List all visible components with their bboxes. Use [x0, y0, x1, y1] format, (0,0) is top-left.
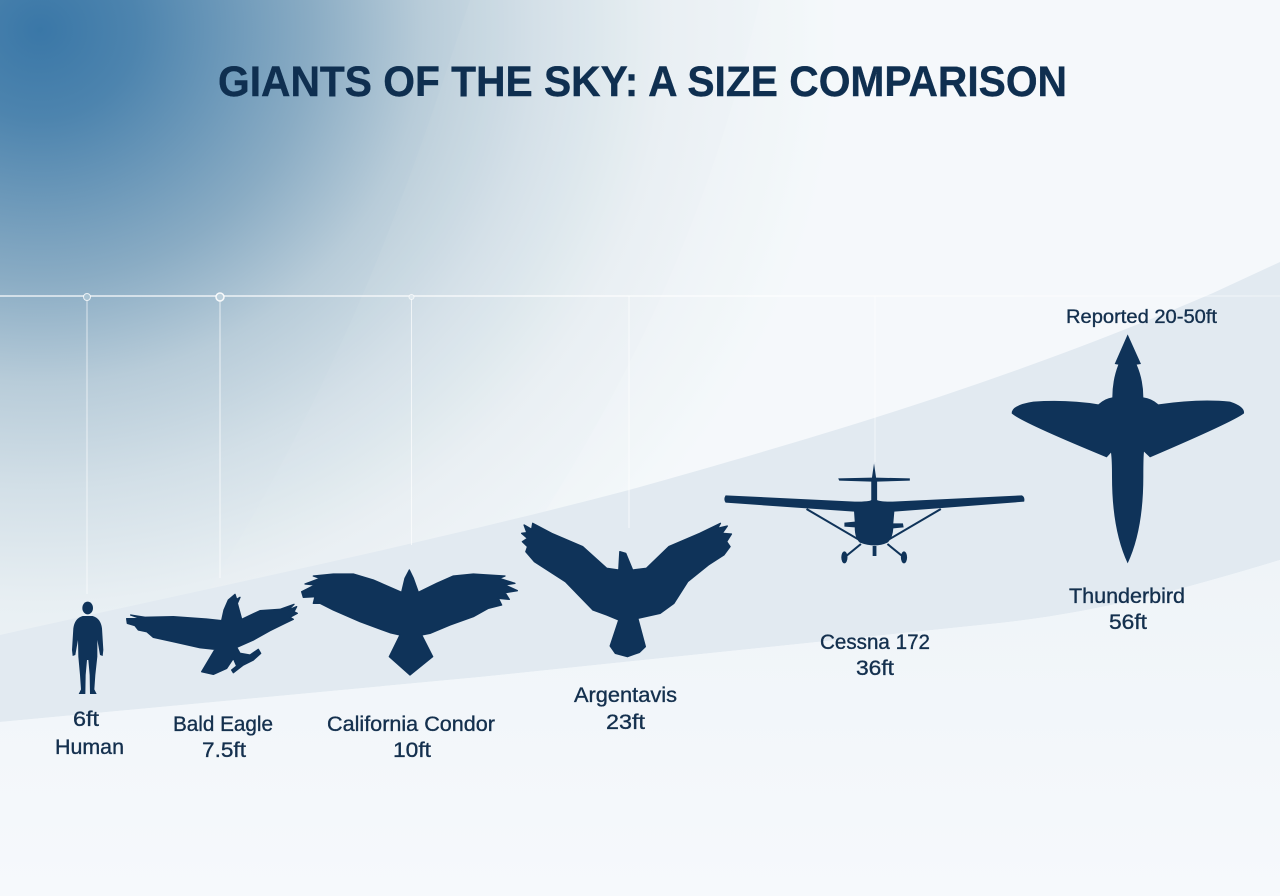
label: thunderbird	[1069, 585, 1185, 634]
silhouette: human	[72, 602, 103, 694]
silhouette: thunderbird	[1012, 334, 1244, 563]
silhouette: cessna 172	[724, 463, 1024, 563]
label: bald eagle: Bald Eagle	[173, 713, 273, 736]
silhouette: bald eagle	[127, 594, 297, 674]
label: argentavis	[574, 684, 677, 734]
label: cessna 172: 36ft	[856, 657, 894, 680]
silhouette: california condor	[302, 570, 517, 675]
label: human: Human	[55, 736, 124, 759]
size band	[0, 262, 1280, 722]
label: thunderbird: 56ft	[1109, 611, 1147, 634]
silhouette: argentavis	[522, 523, 731, 657]
label: human: 6ft	[73, 708, 99, 731]
label: human	[55, 708, 124, 759]
label: bald eagle	[173, 713, 273, 762]
light swoosh overlay	[170, 0, 1280, 650]
label: california condor: California Condor	[327, 713, 495, 736]
label: thunderbird: Thunderbird	[1069, 585, 1185, 608]
label: cessna 172	[820, 631, 930, 680]
title: GIANTS OF THE SKY: A SIZE COMPARISON	[218, 58, 1067, 106]
label: cessna 172: Cessna 172	[820, 631, 930, 654]
reference grid lines	[0, 293, 1280, 594]
label: reported wingspan: Reported 20-50ft	[1066, 307, 1218, 328]
label: argentavis: 23ft	[606, 711, 645, 734]
label: bald eagle: 7.5ft	[202, 739, 246, 762]
label: california condor: 10ft	[393, 739, 431, 762]
label: argentavis: Argentavis	[574, 684, 677, 707]
label: california condor	[327, 713, 495, 762]
light swoosh overlay upper right	[450, 0, 1280, 650]
lower ground area	[0, 560, 1280, 896]
